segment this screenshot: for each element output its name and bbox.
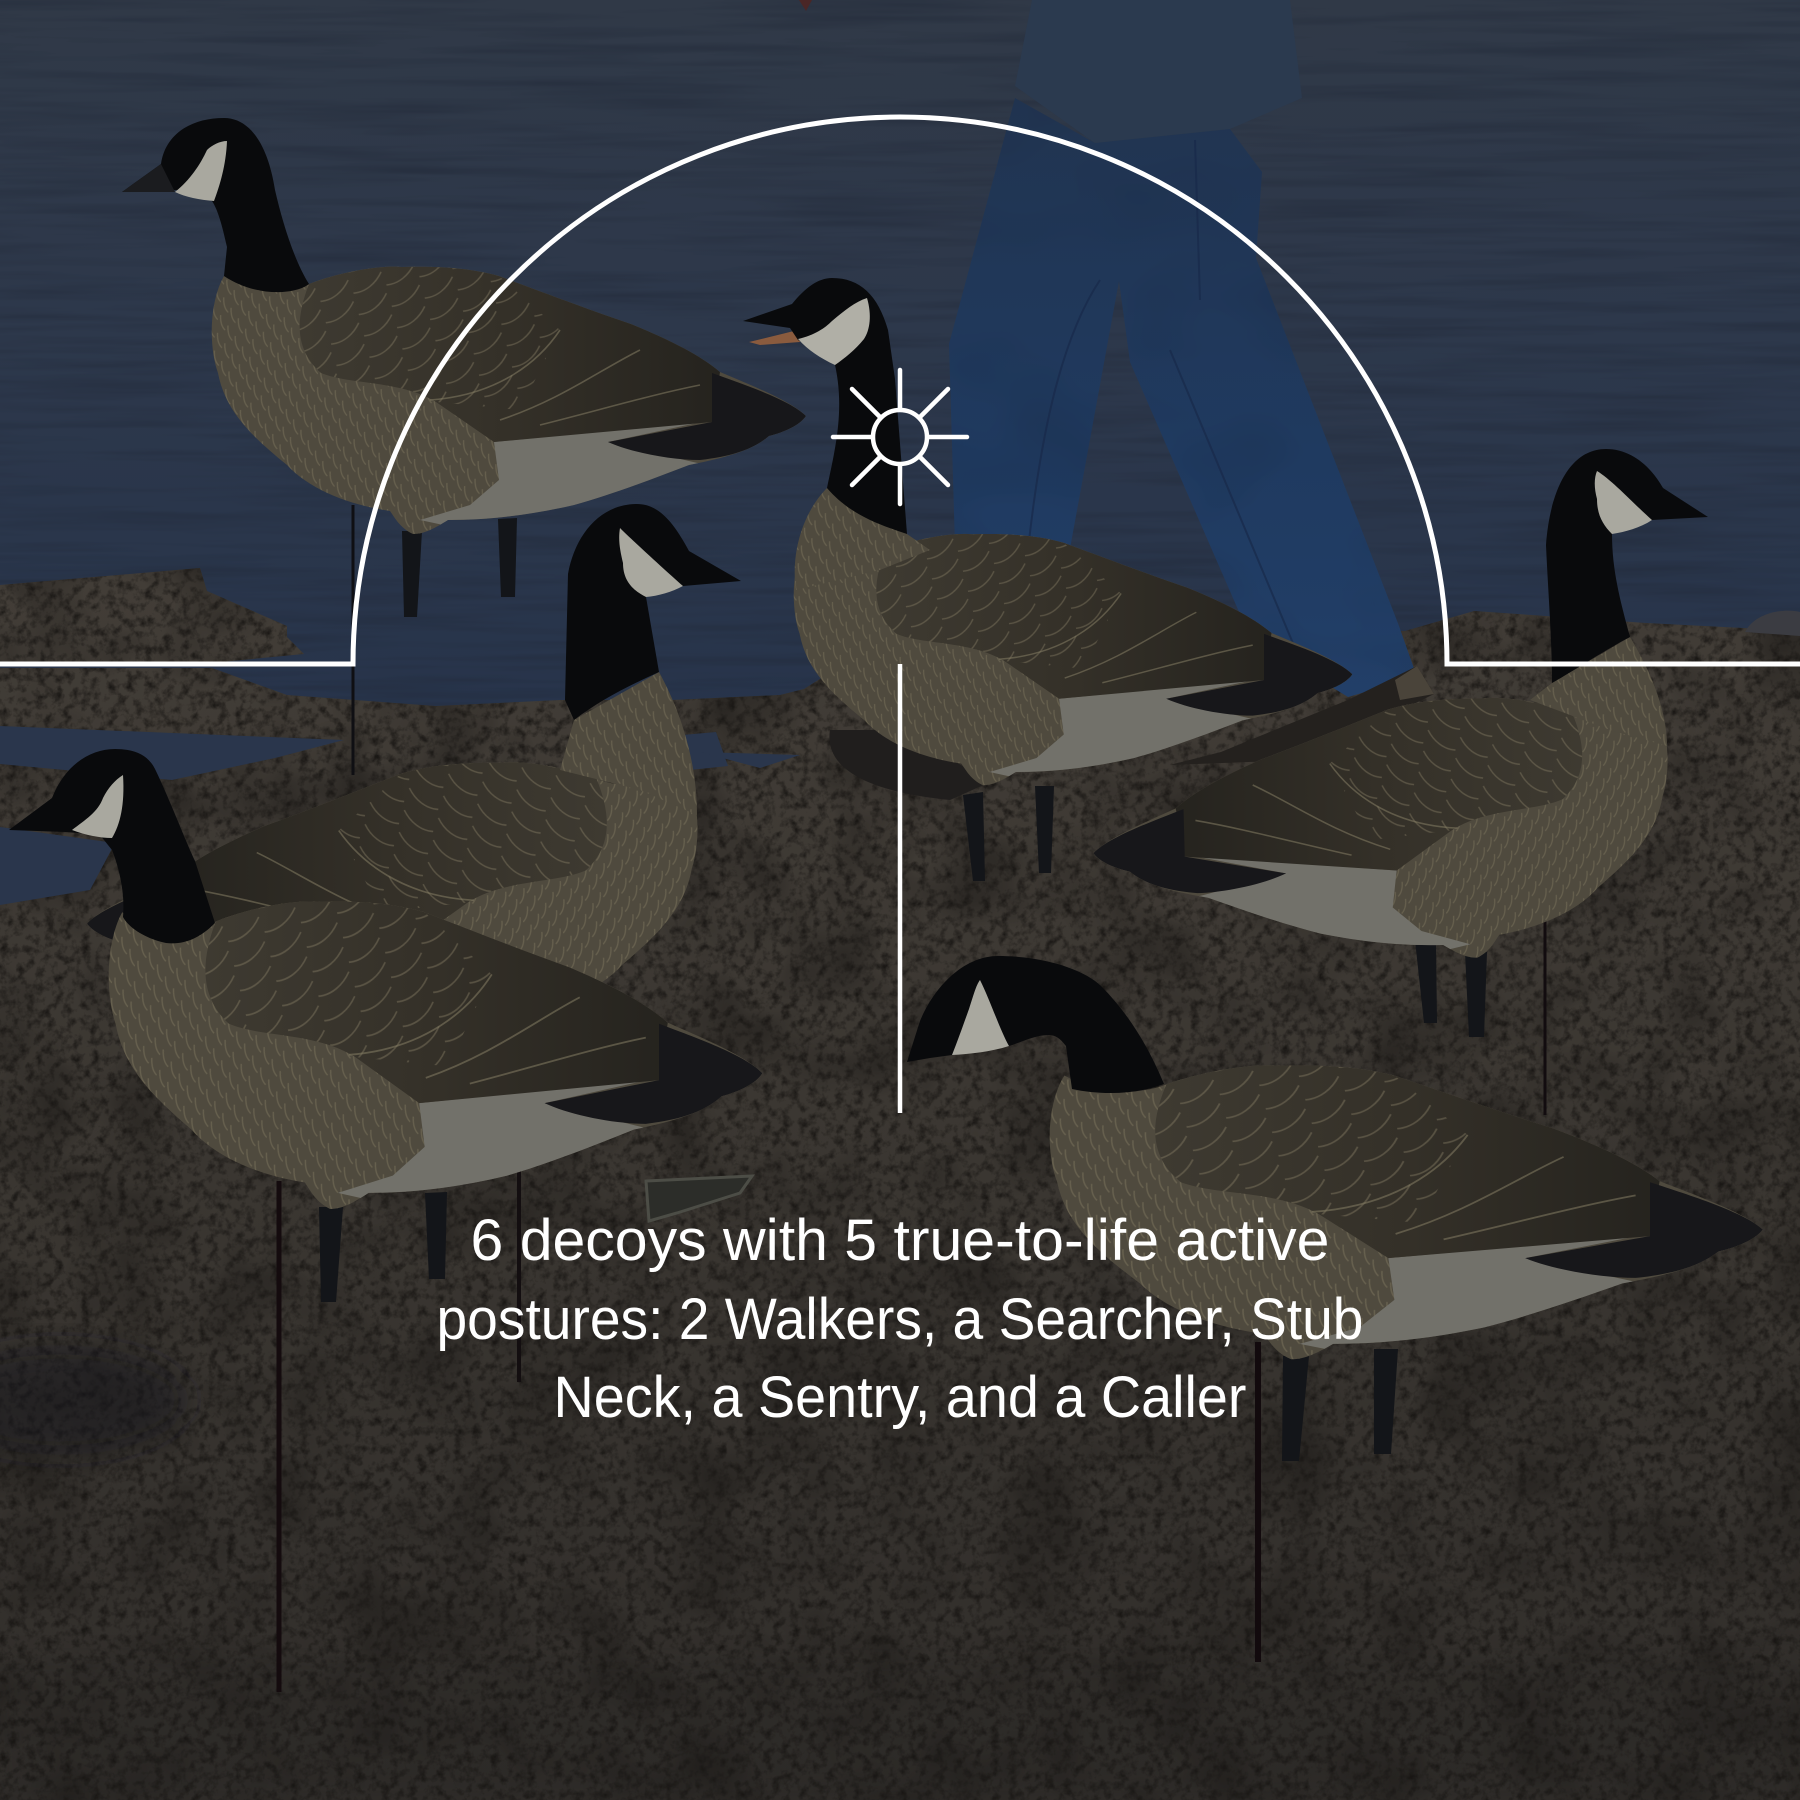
debris: broken glasses on ground: [646, 1176, 752, 1221]
decoy goose: walker right: [1089, 449, 1708, 1115]
decoy goose: searcher lower right: [907, 956, 1763, 1662]
caption text: Neck, a Sentry, and a Caller: [554, 1365, 1246, 1430]
water ripples: [0, 0, 1800, 720]
person: shirt and jeans: [799, 0, 1434, 800]
water pools: [0, 611, 1800, 905]
caption text: 6 decoys with 5 true-to-life active: [470, 1208, 1330, 1273]
decoy goose: walker upper left: [122, 118, 806, 775]
decoy goose: caller center: [743, 278, 1352, 881]
vertical line below arch: [898, 664, 902, 1113]
decoy goose: walker middle left: [84, 504, 741, 1382]
decoy goose: sentry lower left: [9, 749, 762, 1692]
arch outline with horizontal lines: [0, 117, 1800, 664]
icon: sun: [833, 370, 967, 504]
background photo: water: [0, 0, 1800, 720]
caption text: postures: 2 Walkers, a Searcher, Stub: [436, 1287, 1364, 1352]
caption text: [436, 1208, 1364, 1430]
ground: [0, 560, 1800, 1800]
